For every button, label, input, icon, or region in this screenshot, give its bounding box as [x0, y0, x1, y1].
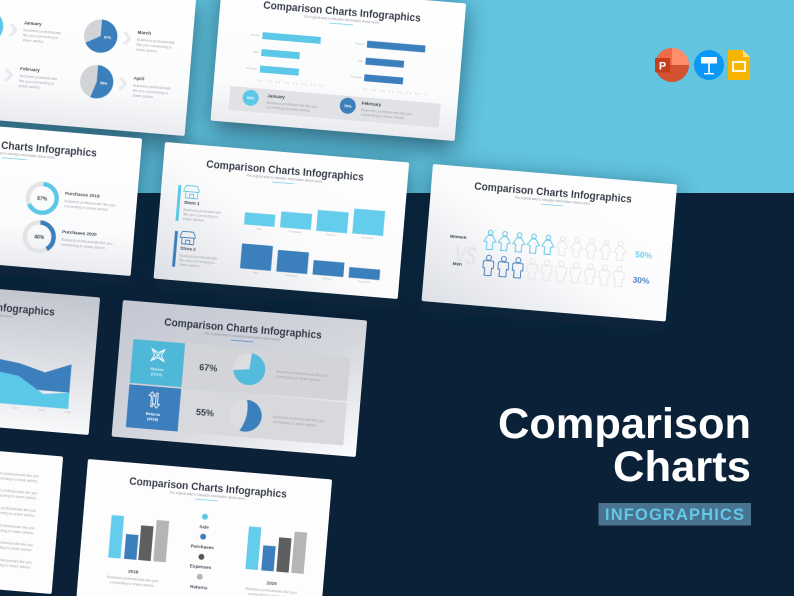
- text: row 1: connecting to share advice.: [276, 375, 321, 382]
- card background: [0, 0, 196, 136]
- card background: [421, 164, 677, 322]
- arrows: [4, 22, 132, 91]
- text: April: [132, 76, 172, 101]
- card background: [0, 118, 142, 276]
- label: Women: Women: [450, 234, 467, 240]
- icon: Keynote: [694, 50, 724, 80]
- pie: 67%: [232, 352, 267, 386]
- badge: INFOGRAPHICS: INFOGRAPHICS: [605, 506, 744, 524]
- axis labels: 2019: [64, 410, 71, 414]
- axis labels: Purchases: [285, 273, 298, 278]
- circle: 60%: [242, 89, 259, 106]
- text: February: connecting to share advice.: [361, 113, 406, 120]
- text: Store 2: share advice.: [179, 263, 201, 268]
- value: 67%: 67%: [199, 362, 218, 374]
- text: Store 1: like you connecting to: [183, 212, 219, 219]
- text: January: [22, 20, 62, 45]
- axis labels: Sale: [256, 226, 262, 231]
- legend: Returns: [190, 573, 209, 590]
- icon: store 1: [183, 185, 199, 199]
- donut: 40%: 40%: [34, 234, 45, 241]
- card background: [112, 300, 367, 457]
- accent line: [231, 340, 253, 342]
- title: Charts: Charts: [613, 443, 751, 491]
- heading: Comparison Charts Infographics: [263, 0, 421, 25]
- right bar chart: [350, 40, 433, 97]
- axis labels: 2017: [13, 406, 19, 410]
- text: February: share advice.: [19, 84, 41, 90]
- text: Store 1: [182, 200, 222, 224]
- text: Purchases 2019: Purchases 2019: [65, 191, 100, 199]
- left bar chart: Sale: [253, 50, 259, 54]
- axis labels: Expenses: [362, 235, 374, 240]
- text: row 2: connecting to share advice.: [272, 420, 318, 428]
- grey row 2: [178, 389, 347, 445]
- left bar chart: Returns: [251, 33, 261, 37]
- left bar chart: Purchase: [246, 66, 258, 71]
- column chart: 2020: [245, 526, 307, 574]
- legend: Returns: Returns: [190, 584, 208, 590]
- slide card: horizontal bars: [210, 0, 466, 141]
- text: January: like you connecting to: [23, 33, 58, 40]
- text: February: February: [361, 101, 382, 107]
- label box: Returns 2018: Returns: [146, 412, 160, 417]
- background: navy lower band: [0, 193, 794, 596]
- text: row 2: [272, 415, 324, 428]
- text: row 2: Business professionals like you: [273, 415, 324, 423]
- text: Store 2: Business professionals: [179, 254, 217, 261]
- text: April: like you connecting to: [133, 89, 168, 95]
- store 2 marker: [172, 231, 178, 267]
- value: 50%: 50%: [635, 249, 653, 261]
- legend: Purchases: [190, 533, 215, 550]
- slide card: purchases donuts: [0, 118, 142, 276]
- donut: 67%: [27, 183, 58, 214]
- text: Store 1: share advice.: [182, 217, 205, 223]
- accent line: [272, 182, 294, 184]
- accent line: [329, 23, 353, 25]
- label: Men: Men: [453, 261, 462, 267]
- accent line: [195, 499, 218, 501]
- text: Purchases 2020: Purchases 2020: [62, 229, 97, 237]
- axis labels: Sale: [253, 270, 259, 275]
- text: March: share advice.: [136, 48, 158, 53]
- label box: Returns 2018: (2018): [147, 417, 159, 422]
- heading: Comparison Charts Infographics: [129, 476, 287, 501]
- legend: Expenses: Expenses: [190, 563, 212, 570]
- subheading: It is a great way to visualize information about users: [303, 14, 380, 25]
- text: Store 2: [179, 246, 218, 270]
- left bar chart: 00 10 20 30 40 50 60 70: [258, 78, 324, 88]
- subheading: It is a great way to visualize information about users: [204, 331, 281, 342]
- text: Store 1: Business professionals: [183, 208, 221, 215]
- info band: [228, 86, 441, 128]
- text: row 1: Business professionals like you: [277, 370, 328, 378]
- circle: 60%: 60%: [247, 96, 255, 101]
- text: February: [19, 66, 58, 91]
- text: February: February: [20, 66, 40, 73]
- text: March: March: [137, 30, 151, 36]
- caption: 2019: connecting to share advice.: [110, 580, 155, 588]
- VS watermark: VS: [453, 241, 478, 271]
- slide card: monthly pie charts: [0, 0, 196, 136]
- circle: 70%: 70%: [344, 104, 352, 109]
- right bar chart: Sale: [358, 59, 364, 63]
- text: Store 1: Store 1: [184, 200, 200, 206]
- text: Purchases 2019: connecting to share advice.: [64, 204, 109, 212]
- text: April: April: [134, 76, 144, 81]
- text: April: share advice.: [132, 94, 154, 99]
- slide card: returns comparison: [112, 300, 367, 457]
- icon: PowerPoint: [655, 48, 689, 82]
- label box: Returns 2014: [130, 339, 185, 387]
- axis labels: 2018: [38, 408, 45, 412]
- subheading: It is a great way to visualize information about users: [169, 490, 246, 501]
- accent line: [541, 204, 563, 206]
- axis labels: [13, 406, 71, 414]
- legend: Sales: Sale: [199, 524, 209, 530]
- background: teal top band: [0, 0, 794, 193]
- text: March: Business professionals: [137, 38, 175, 45]
- text: Purchases 2019: Business professionals like you: [64, 199, 116, 207]
- slide card: store bars: [154, 142, 409, 299]
- slide card: women vs men pictograms: [421, 164, 677, 322]
- legend: Sales: [199, 513, 210, 530]
- bar chart: store 1: [244, 199, 385, 236]
- text: February: Business professionals like you: [361, 108, 412, 116]
- pictogram row: men: [482, 255, 625, 287]
- value: 30%: 30%: [632, 275, 650, 286]
- text: Purchases 2020: [61, 229, 113, 251]
- text: March: like you connecting to: [136, 43, 172, 50]
- label box: Returns 2014: (2014): [151, 372, 163, 377]
- pie: 55%: [228, 398, 263, 433]
- text: Store 2: Store 2: [180, 246, 196, 252]
- right bar chart: Purchase: [350, 75, 362, 80]
- area chart: cyan series: [0, 357, 71, 409]
- axis labels: Expenses: [358, 279, 371, 284]
- text: Purchases 2019: [64, 191, 116, 212]
- card background: [0, 436, 63, 594]
- caption: 2019: Business professionals like you: [107, 575, 158, 583]
- card background: [210, 0, 466, 141]
- pie: April 55%: [79, 64, 115, 100]
- pie: March 67%: [83, 18, 119, 54]
- text: February: Business professionals: [19, 74, 57, 81]
- card background: [154, 142, 409, 299]
- text: February: [361, 101, 413, 121]
- text: Purchases 2020: Business professionals like you: [61, 238, 113, 246]
- card background: [0, 277, 100, 435]
- text: January: connecting to share advice.: [266, 105, 311, 113]
- icon: PowerPoint: P: [659, 60, 666, 72]
- text: April: Business professionals: [133, 84, 171, 91]
- area chart: dark series: [0, 341, 72, 393]
- caption: 2020: [245, 579, 297, 596]
- card background: [76, 459, 332, 596]
- title: Comparison: Comparison: [498, 400, 751, 448]
- bar chart: store 2: [240, 243, 381, 280]
- text: January: January: [267, 93, 286, 100]
- heading: Comparison Charts Infographics: [164, 317, 322, 342]
- circle: 70%: [339, 97, 356, 114]
- label box: Returns 2014: Returns: [150, 367, 164, 372]
- pie: March 67%: 67%: [104, 35, 112, 40]
- pie: April 55%: 55%: [100, 81, 108, 86]
- caption: 2019: [106, 567, 159, 588]
- axis labels: Purchases: [289, 229, 302, 234]
- text: January: Business professionals: [23, 28, 61, 35]
- text list: [0, 470, 39, 570]
- caption: 2020: Business professionals like you: [245, 587, 297, 595]
- heading: Comparison Charts Infographics: [474, 181, 632, 206]
- partial arcs on the left: [0, 191, 1, 221]
- slide card: yearly column charts: [76, 459, 332, 596]
- icon: Google Slides: [728, 50, 750, 80]
- accent line: [2, 157, 27, 160]
- pie: cyan partially visible: [0, 8, 5, 44]
- axis labels: Returns: [326, 232, 336, 237]
- slide card: text list (cropped): [0, 436, 63, 594]
- grey row 1: [182, 343, 351, 401]
- card shadows: [0, 0, 677, 332]
- slide card: area chart: [0, 277, 100, 435]
- right bar chart: 00 10 20 30 40 50 60 70: [362, 87, 429, 97]
- icon: store 2: [180, 231, 196, 245]
- text: Store 2: like you connecting to: [179, 258, 215, 265]
- right bar chart: Returns: [355, 41, 365, 46]
- text: February: like you connecting to: [19, 79, 55, 86]
- text: Purchases 2020: connecting to share advice.: [61, 243, 106, 250]
- text: March: [136, 30, 176, 55]
- subheading: It is a great way to visualize information about users: [514, 195, 591, 206]
- donut: 67%: 67%: [37, 196, 48, 203]
- legend: Expenses: [190, 553, 213, 570]
- caption: 2019: 2019: [128, 569, 139, 575]
- value: 55%: 55%: [196, 407, 214, 418]
- text: January: share advice.: [22, 38, 45, 44]
- left bar chart: [245, 31, 328, 88]
- legend: Purchases: Purchases: [190, 543, 214, 550]
- text: January: Business professionals like you: [267, 100, 318, 109]
- caption: 2020: 2020: [266, 580, 277, 586]
- axis labels: Returns: [322, 276, 333, 281]
- pictogram row: women: [483, 230, 627, 261]
- text: January: January: [24, 20, 42, 27]
- text: row 1: [276, 370, 328, 383]
- subheading: It is a great way to visualize information about users: [246, 173, 323, 184]
- axis labels: [253, 226, 374, 284]
- text: January: [266, 93, 319, 113]
- label box: Returns 2018: [126, 384, 181, 432]
- store 1 marker: [175, 185, 181, 221]
- donut: 40%: [24, 221, 55, 252]
- heading: Comparison Charts Infographics: [206, 159, 364, 184]
- column chart: 2019: [108, 515, 169, 562]
